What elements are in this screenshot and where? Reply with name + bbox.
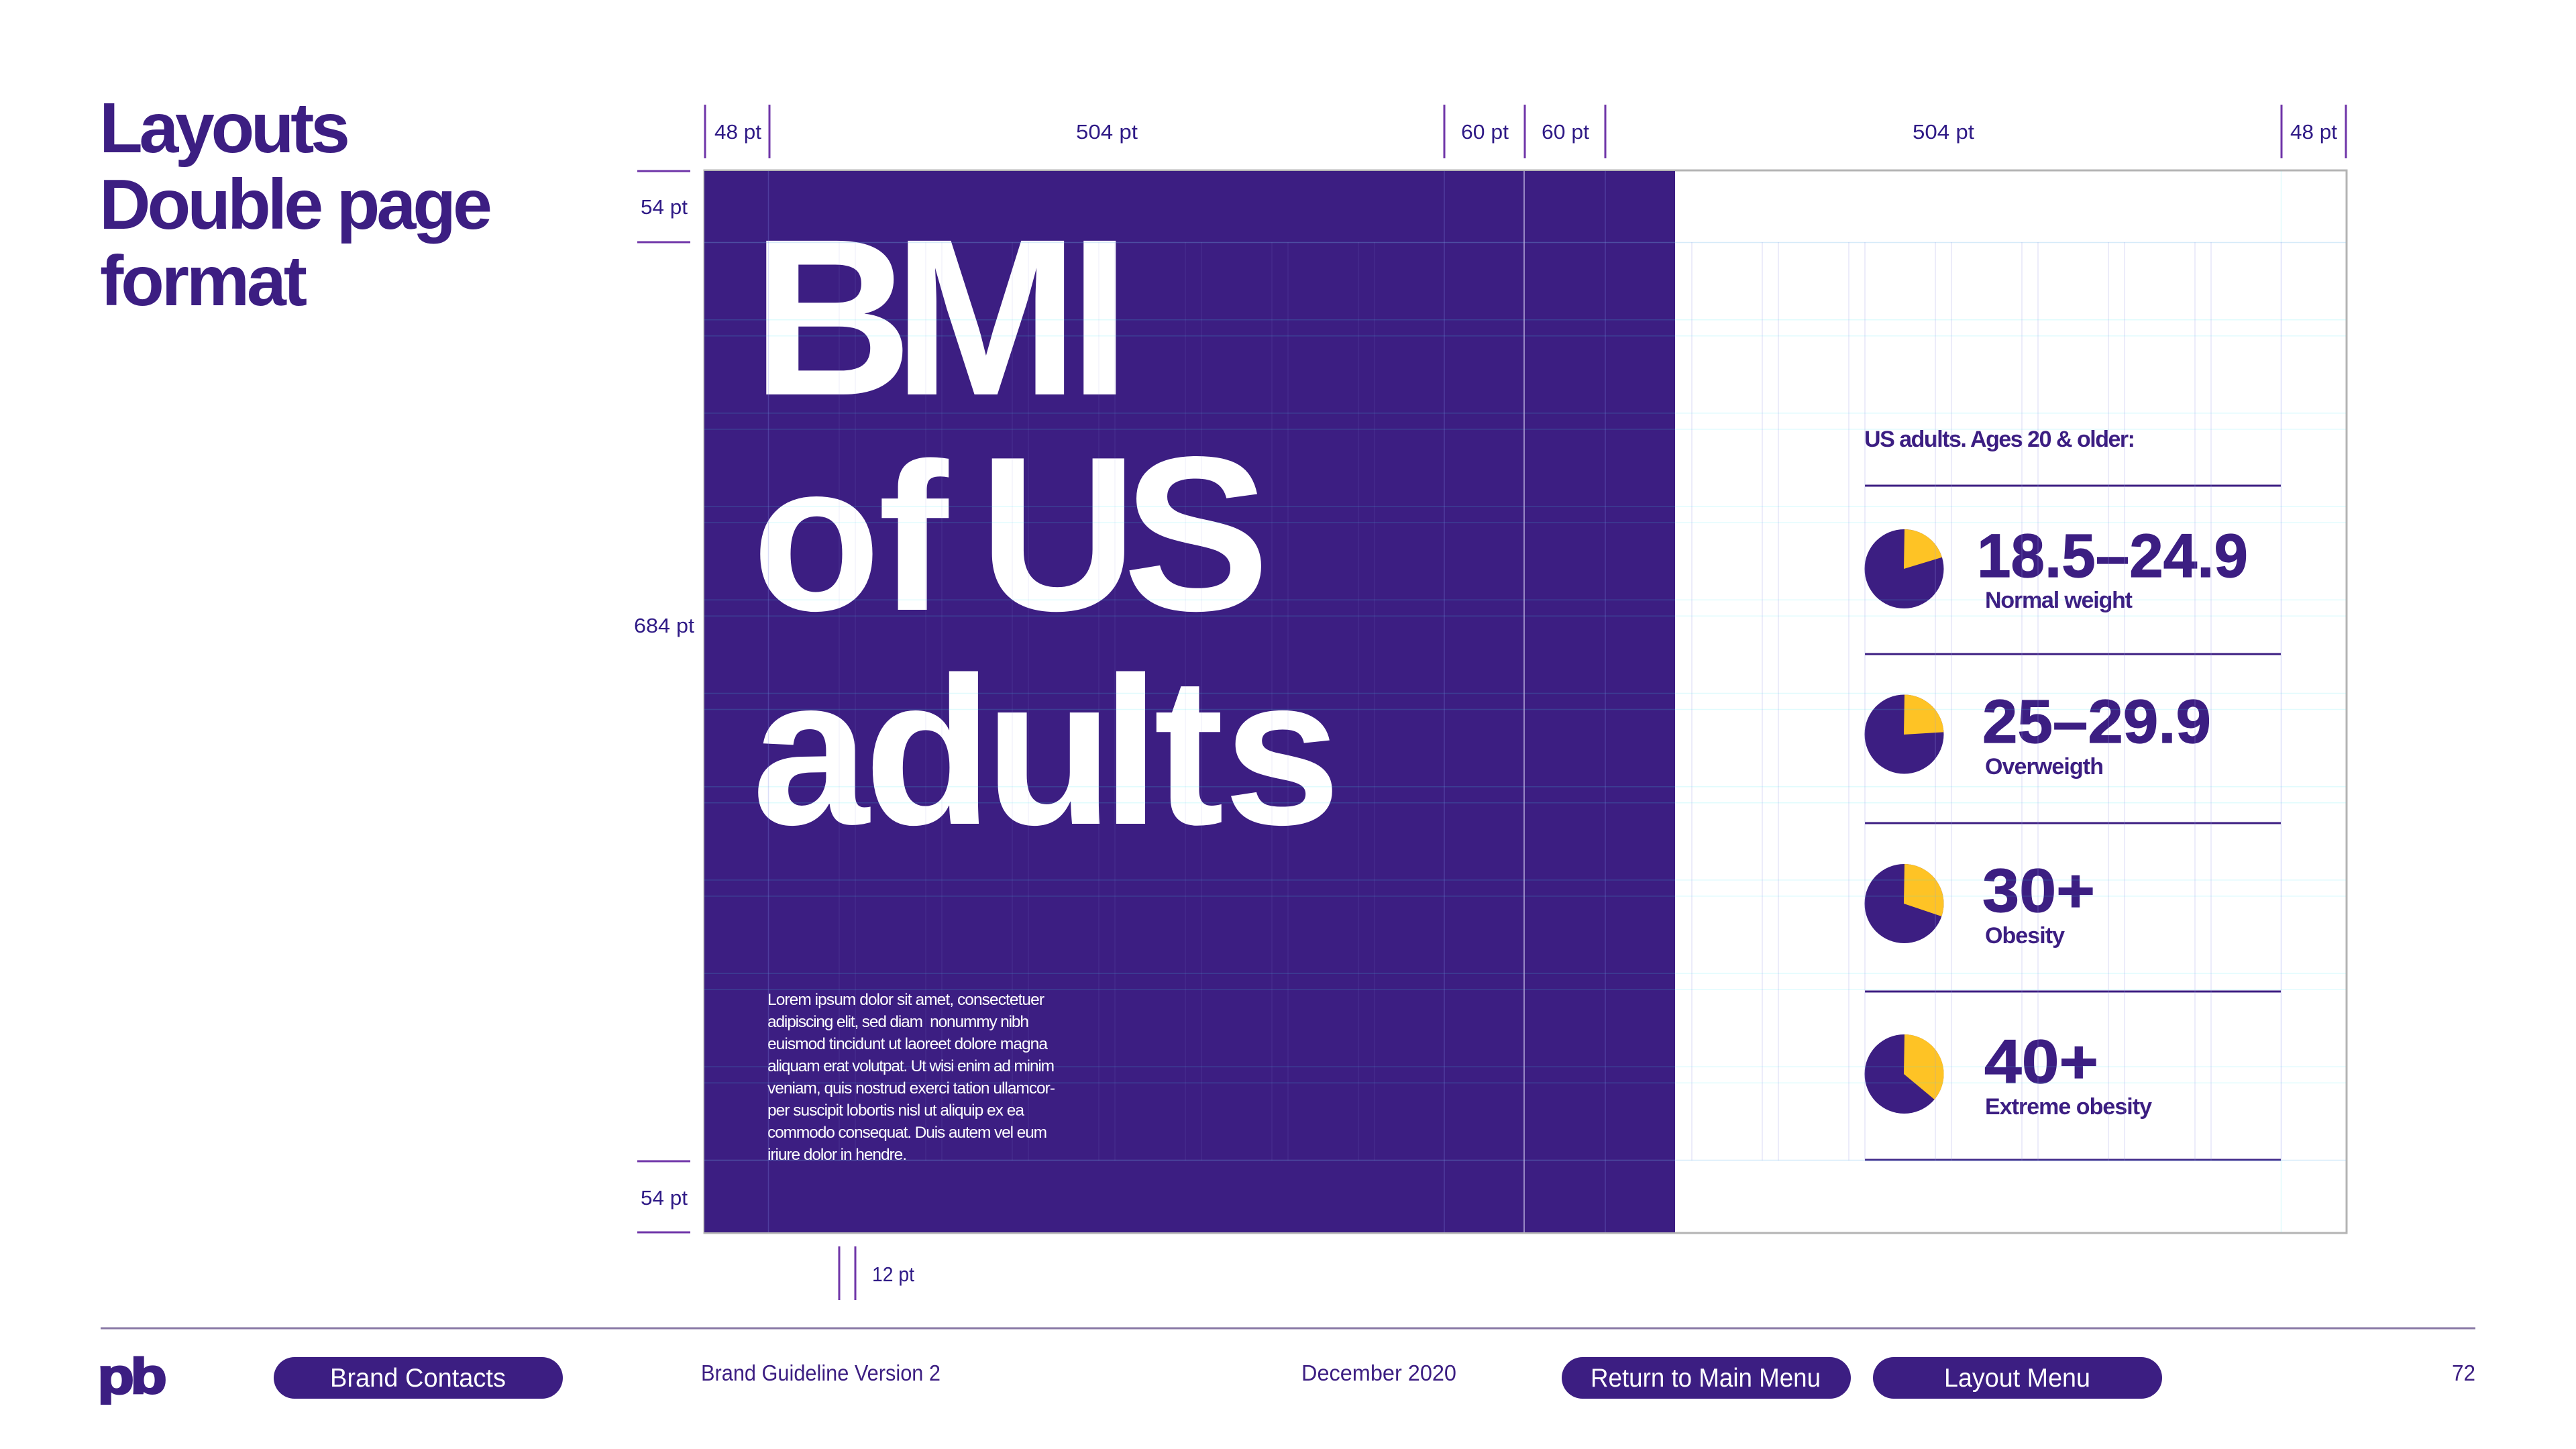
button: return to main menu: Return to Main Menu: [1591, 1364, 1821, 1393]
pie chart: extreme obesity: [1865, 1034, 1944, 1114]
headline: US: [979, 411, 1270, 657]
measure: top column widths: 504 pt: [1913, 120, 1974, 144]
body text: euismod tincidunt ut laoreet dolore magna: [767, 1035, 1048, 1053]
row: overweight: Overweigth: [1985, 754, 2104, 780]
headline: BMI: [751, 193, 1131, 442]
logo: p: [98, 1349, 134, 1404]
headline: of: [752, 419, 951, 655]
button: layout menu: [1873, 1357, 2162, 1399]
row: normal weight: Normal weight: [1985, 588, 2133, 613]
footer: version: Brand Guideline Version 2: [701, 1360, 941, 1385]
measure: top column widths: 60 pt: [1461, 120, 1509, 144]
body text: Lorem ipsum dolor sit amet, consectetuer: [767, 991, 1044, 1009]
divider rules: [1865, 486, 2281, 1160]
measure: left margins: 684 pt: [634, 614, 694, 637]
row: normal weight: [1865, 522, 2248, 613]
pie chart: overweight: [1865, 695, 1944, 774]
body text: commodo consequat. Duis autem vel eum: [767, 1124, 1047, 1142]
page number: 72: [2452, 1360, 2475, 1385]
body text: adipiscing elit, sed diam nonummy nibh: [767, 1013, 1029, 1031]
row: overweight: 25–29.9: [1982, 688, 2211, 756]
body text: veniam, quis nostrud exerci tation ullamcor-: [767, 1079, 1055, 1097]
measure: left margins: 54 pt: [641, 195, 688, 219]
button: brand contacts: [274, 1357, 563, 1399]
footer: date: December 2020: [1301, 1360, 1456, 1385]
logo: b: [130, 1349, 167, 1404]
row: extreme obesity: [1865, 1028, 2152, 1120]
title: Layouts: [99, 89, 350, 168]
measure: top column widths: 504 pt: [1076, 120, 1138, 144]
measure: top column widths: 60 pt: [1542, 120, 1589, 144]
title: format: [100, 241, 307, 321]
measure: gutter: [839, 1246, 914, 1300]
row: obesity: 30+: [1982, 857, 2095, 925]
button: return to main menu: [1562, 1357, 1851, 1399]
body text: aliquam erat volutpat. Ut wisi enim ad minim: [767, 1057, 1055, 1075]
panel: double page spread frame: [704, 170, 2347, 1233]
row: extreme obesity: 40+: [1984, 1028, 2098, 1096]
title: [99, 89, 492, 321]
pie chart: normal weight: [1865, 529, 1944, 608]
measure: top column widths: 48 pt: [2290, 120, 2337, 144]
measure: gutter: 12 pt: [872, 1263, 914, 1286]
logo: [98, 1349, 167, 1404]
row: extreme obesity: Extreme obesity: [1985, 1094, 2152, 1120]
row: overweight: [1865, 688, 2211, 780]
row: obesity: Obesity: [1985, 923, 2065, 949]
measure: top column widths: [705, 105, 2346, 158]
pie chart: obesity: [1865, 864, 1944, 943]
row: obesity: [1865, 857, 2095, 949]
button: layout menu: Layout Menu: [1944, 1364, 2090, 1393]
measure: left margins: 54 pt: [641, 1186, 688, 1210]
body text: iriure dolor in hendre.: [767, 1146, 907, 1164]
subtitle: US adults. Ages 20 & older:: [1864, 427, 2135, 452]
measure: left margins: [634, 171, 694, 1232]
title: Double page: [99, 165, 492, 244]
measure: top column widths: 48 pt: [714, 120, 761, 144]
body text: [767, 991, 1055, 1164]
row: normal weight: 18.5–24.9: [1977, 522, 2248, 590]
headline: [751, 193, 1341, 869]
headline: adults: [752, 633, 1341, 869]
body text: per suscipit lobortis nisl ut aliquip ex ea: [767, 1102, 1024, 1120]
footer: [98, 1328, 2475, 1404]
button: brand contacts: Brand Contacts: [330, 1364, 506, 1393]
panel: BMI categories: [1864, 427, 2281, 1160]
